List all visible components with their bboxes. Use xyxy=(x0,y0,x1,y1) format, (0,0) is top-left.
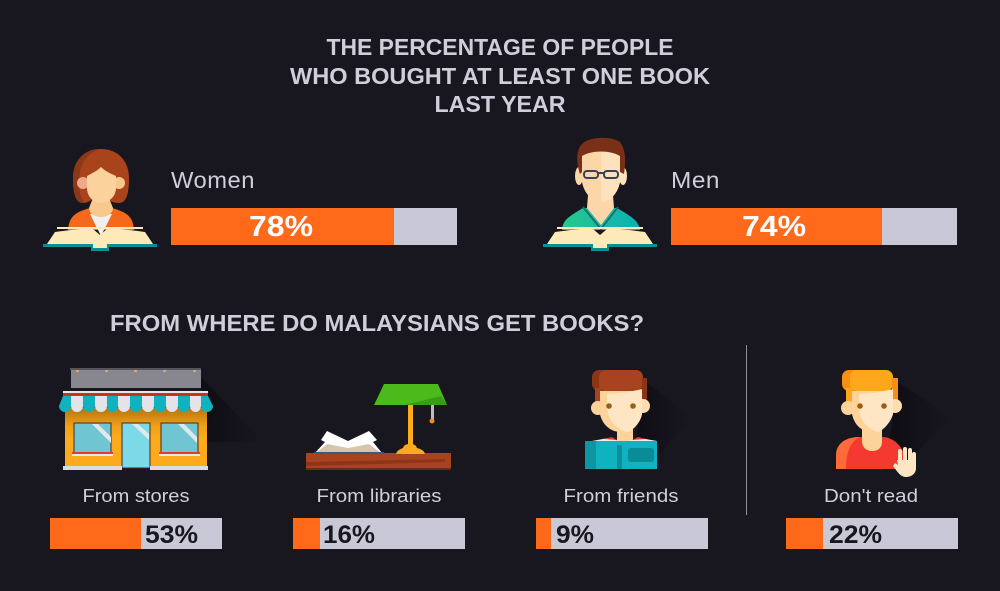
bar: women 78%: 78% xyxy=(249,211,313,243)
awning scallops xyxy=(59,396,213,412)
icon: woman reading xyxy=(43,149,157,251)
icon: open book xyxy=(43,227,157,251)
label: women: Women xyxy=(171,167,255,193)
eyes: friend xyxy=(606,403,636,409)
bar: don't read 22%: 22% xyxy=(829,521,882,549)
icon: open book xyxy=(543,227,657,251)
title xyxy=(290,34,710,117)
label: from friends: From friends xyxy=(564,486,678,506)
title: WHO BOUGHT AT LEAST ONE BOOK xyxy=(290,63,710,89)
label: from libraries: From libraries xyxy=(316,486,442,506)
hand xyxy=(893,447,916,477)
label: don't read: Don't read xyxy=(824,486,918,506)
title: THE PERCENTAGE OF PEOPLE xyxy=(326,34,674,60)
label: men: Men xyxy=(671,167,720,193)
bar: don't read 22% xyxy=(786,518,958,549)
title: LAST YEAR xyxy=(434,91,566,117)
section heading: FROM WHERE DO MALAYSIANS GET BOOKS? xyxy=(110,310,644,336)
icon: person raising hand xyxy=(836,370,952,477)
bar: women 78% xyxy=(171,208,457,245)
bar: friends 9%: 9% xyxy=(556,521,594,549)
bar: stores 53%: 53% xyxy=(145,521,198,549)
bar: men 74%: 74% xyxy=(742,211,806,243)
label: from stores: From stores xyxy=(82,486,190,506)
icon: friend with book xyxy=(585,370,692,470)
bar: libraries 16% xyxy=(293,518,465,549)
bar: friends 9% xyxy=(536,518,708,549)
bar: men 74% xyxy=(671,208,957,245)
icon: book store xyxy=(59,368,264,470)
icon: library desk with lamp and book xyxy=(306,384,451,470)
bar: libraries 16%: 16% xyxy=(323,521,375,549)
bar: stores 53% xyxy=(50,518,222,549)
divider xyxy=(746,345,747,515)
icon: man reading xyxy=(543,138,657,251)
